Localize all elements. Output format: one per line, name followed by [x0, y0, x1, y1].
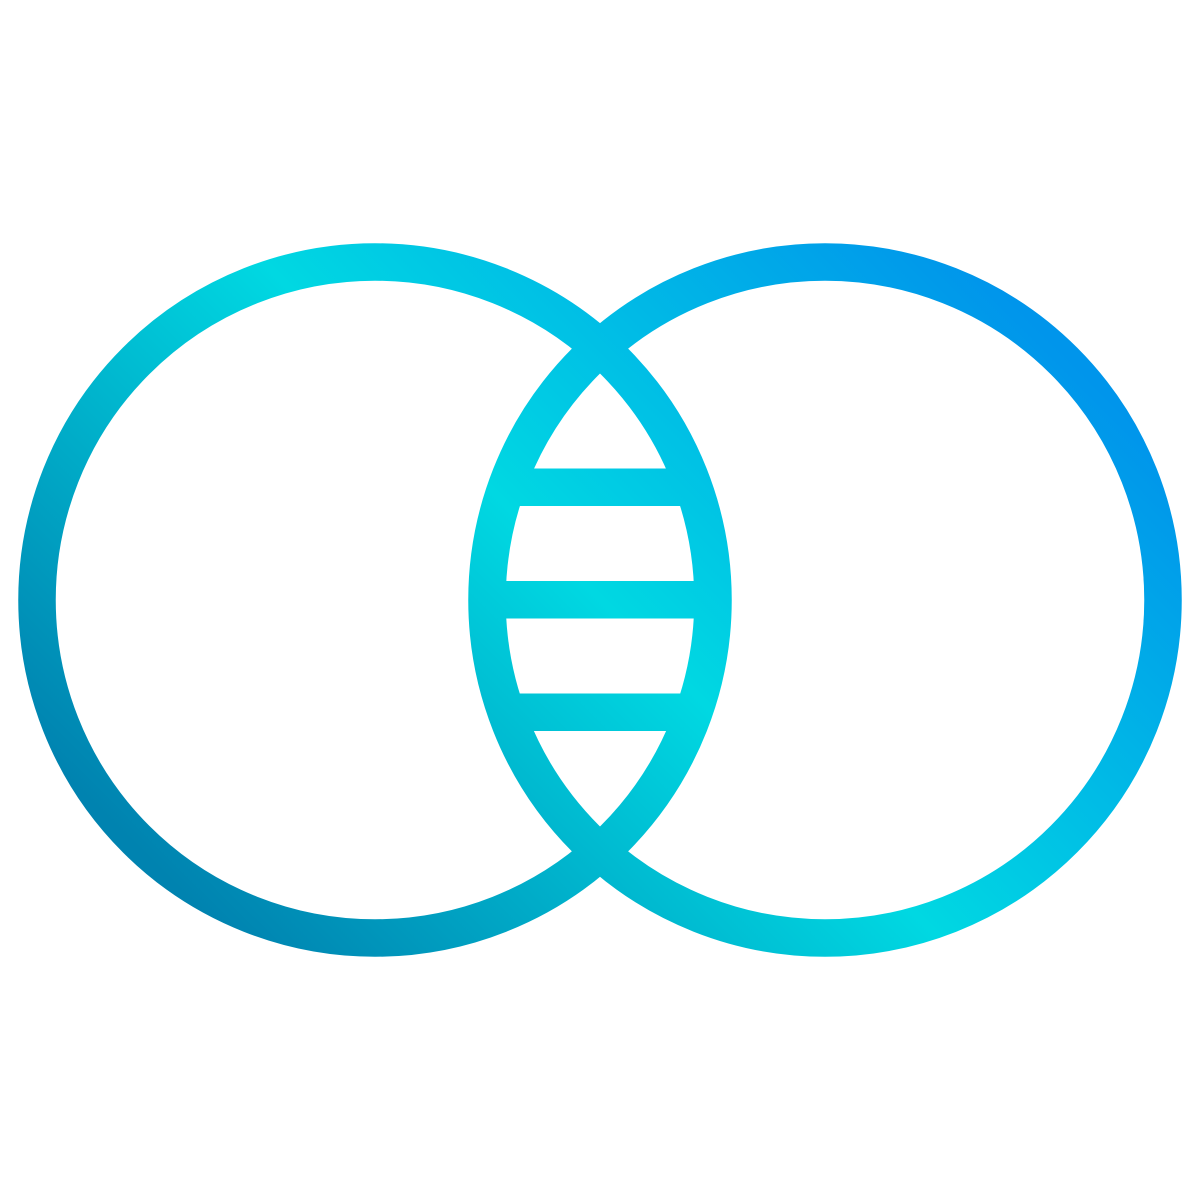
left ring [37, 262, 713, 938]
lower bar in intersection [506, 694, 694, 731]
upper bar in intersection [506, 468, 694, 506]
middle bar in intersection [487, 581, 713, 618]
right ring [487, 262, 1163, 938]
